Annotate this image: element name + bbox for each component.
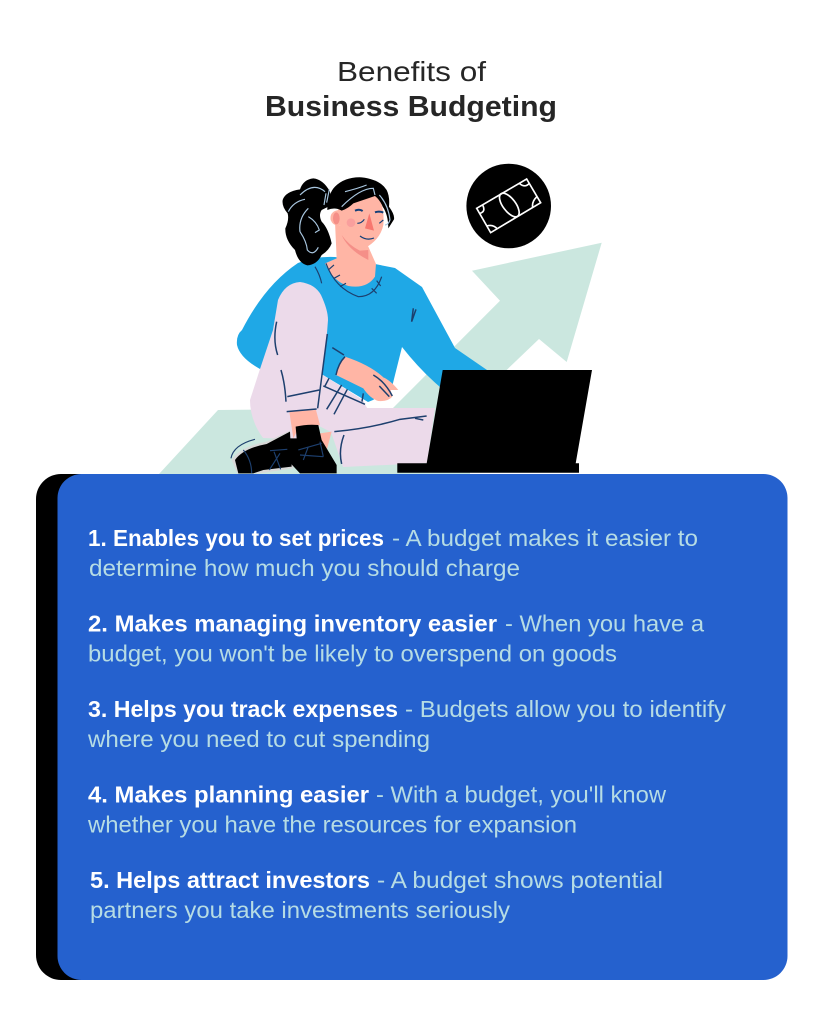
benefit 4: - With a budget, you'll know: [376, 782, 667, 808]
title: Benefits of: [337, 56, 486, 87]
benefit 1: 1. Enables you to set prices: [88, 525, 384, 551]
sweater: [237, 257, 487, 402]
benefit 5: [90, 867, 663, 923]
head: [283, 177, 394, 297]
benefit 1: - A budget makes it easier to: [392, 525, 698, 551]
shoes: [231, 425, 337, 473]
face details: [355, 210, 383, 213]
illustration: woman with laptop: [231, 177, 592, 473]
face: [330, 193, 384, 251]
benefit 2: - When you have a: [505, 610, 705, 636]
benefit 4: [87, 782, 667, 838]
benefit 4: whether you have the resources for expansion: [87, 812, 577, 838]
pants: [250, 282, 435, 467]
icon: money coin: [466, 164, 551, 248]
hair top: [327, 177, 394, 228]
benefit 3: - Budgets allow you to identify: [405, 696, 726, 722]
benefit 4: 4. Makes planning easier: [88, 782, 369, 808]
benefit 3: [87, 696, 726, 752]
cheeks: [347, 218, 355, 227]
benefit 2: [88, 610, 705, 666]
collar lines: [315, 263, 382, 297]
hand: [332, 348, 398, 401]
benefit 2: 2. Makes managing inventory easier: [88, 610, 497, 636]
benefit 5: partners you take investments seriously: [90, 897, 510, 923]
benefit 5: 5. Helps attract investors: [90, 867, 370, 893]
benefit 3: where you need to cut spending: [87, 726, 430, 752]
title: Business Budgeting: [265, 91, 557, 123]
laptop: [397, 370, 592, 473]
skin: ankle: [289, 410, 332, 457]
icon: growth arrow: [159, 243, 602, 474]
neck: [325, 222, 376, 287]
ponytail: [283, 178, 332, 265]
title: [265, 56, 557, 123]
hair highlights: [288, 185, 390, 253]
benefit 2: budget, you won't be likely to overspend on goods: [88, 640, 617, 666]
panel: benefits card: [58, 474, 788, 980]
benefit 5: - A budget shows potential: [377, 867, 663, 893]
benefit 3: 3. Helps you track expenses: [88, 696, 398, 722]
panel: backing shadow: [36, 474, 336, 980]
pants creases: [275, 308, 427, 464]
benefit 1: determine how much you should charge: [89, 555, 520, 581]
benefit 1: [88, 525, 698, 581]
